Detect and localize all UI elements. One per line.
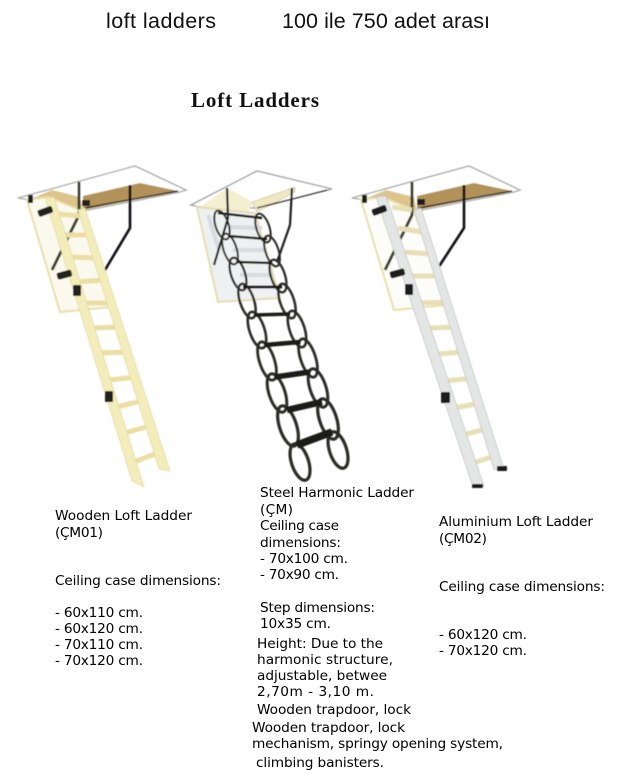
ceiling hatch xyxy=(18,166,186,216)
illustration: steel harmonic ladder xyxy=(191,171,352,483)
text block: wooden ladder specifications: - 70x120 cm. xyxy=(55,653,143,669)
ladder steps xyxy=(58,214,160,462)
text block: aluminium ladder specifications xyxy=(439,514,605,659)
text block: steel harmonic ladder specifications: Steel Harmonic Ladder xyxy=(260,485,414,501)
text block: steel harmonic ladder specifications: - 70x100 cm. xyxy=(260,551,348,567)
text block: wooden ladder specifications xyxy=(55,508,221,669)
scissor links, right side xyxy=(252,212,352,471)
text block: aluminium ladder specifications: Ceiling case dimensions: xyxy=(439,579,605,595)
text block: steel harmonic ladder specifications: 2,70m - 3,10 m. xyxy=(257,684,374,700)
text block: wooden ladder specifications: (ÇM01) xyxy=(55,525,103,541)
illustration: wooden loft ladder xyxy=(18,166,186,487)
text block: steel harmonic ladder specifications: harmonic structure, xyxy=(257,652,393,668)
title: product and quantity range xyxy=(106,9,490,33)
hinge latches and feet xyxy=(362,195,507,488)
text block: aluminium ladder specifications: - 60x120 cm. xyxy=(439,627,527,643)
illustration: aluminium loft ladder xyxy=(352,166,520,488)
hinge latches xyxy=(28,195,113,402)
text block: aluminium ladder specifications: Aluminium Loft Ladder xyxy=(439,514,593,530)
ladder rails xyxy=(45,197,170,487)
scissor links, left side xyxy=(211,209,314,483)
support arms xyxy=(385,182,464,270)
text block: wooden ladder specifications: - 60x120 cm. xyxy=(55,621,143,637)
text block: steel harmonic ladder specifications: 10x35 cm. xyxy=(260,616,331,632)
text block: steel harmonic ladder specifications: Wooden trapdoor, lock xyxy=(252,720,405,736)
text block: steel harmonic ladder specifications: (ÇM) xyxy=(260,502,293,518)
open trapdoor panel xyxy=(361,197,446,310)
ladder rails xyxy=(376,196,504,486)
text block: aluminium ladder specifications: (ÇM02) xyxy=(439,531,487,547)
title: product and quantity range: 100 ile 750 adet arası xyxy=(282,9,490,33)
text block: steel harmonic ladder specifications: Ceiling case xyxy=(260,518,339,534)
text block: steel harmonic ladder specifications: climbing banisters. xyxy=(256,755,384,771)
text block: wooden ladder specifications: Ceiling case dimensions: xyxy=(55,573,221,589)
text block: steel harmonic ladder specifications: mechanism, springy opening system, xyxy=(252,736,503,752)
text block: steel harmonic ladder specifications xyxy=(252,485,503,771)
text block: wooden ladder specifications: Wooden Loft Ladder xyxy=(55,508,192,524)
text block: wooden ladder specifications: - 60x110 cm. xyxy=(55,605,143,621)
text block: steel harmonic ladder specifications: Wooden trapdoor, lock xyxy=(257,702,411,718)
text block: aluminium ladder specifications: - 70x120 cm. xyxy=(439,643,527,659)
text block: steel harmonic ladder specifications: dimensions: xyxy=(260,535,341,551)
inner door steps xyxy=(208,215,273,275)
ladder steps xyxy=(218,213,332,445)
support arms xyxy=(214,188,292,265)
text block: wooden ladder specifications: - 70x110 cm. xyxy=(55,637,143,653)
title: product and quantity range: loft ladders xyxy=(106,9,216,33)
ceiling hatch xyxy=(352,166,520,216)
ceiling hatch xyxy=(191,171,332,213)
heading: Loft Ladders: Loft Ladders xyxy=(191,88,319,112)
text block: steel harmonic ladder specifications: Height: Due to the xyxy=(257,636,383,652)
text block: steel harmonic ladder specifications: - 70x90 cm. xyxy=(260,567,339,583)
open trapdoor panel xyxy=(197,207,280,302)
open trapdoor panel xyxy=(27,197,112,312)
text block: steel harmonic ladder specifications: Step dimensions: xyxy=(260,600,375,616)
ladder steps xyxy=(392,207,498,463)
support arms xyxy=(52,182,130,270)
text block: steel harmonic ladder specifications: adjustable, betwee xyxy=(257,668,387,684)
